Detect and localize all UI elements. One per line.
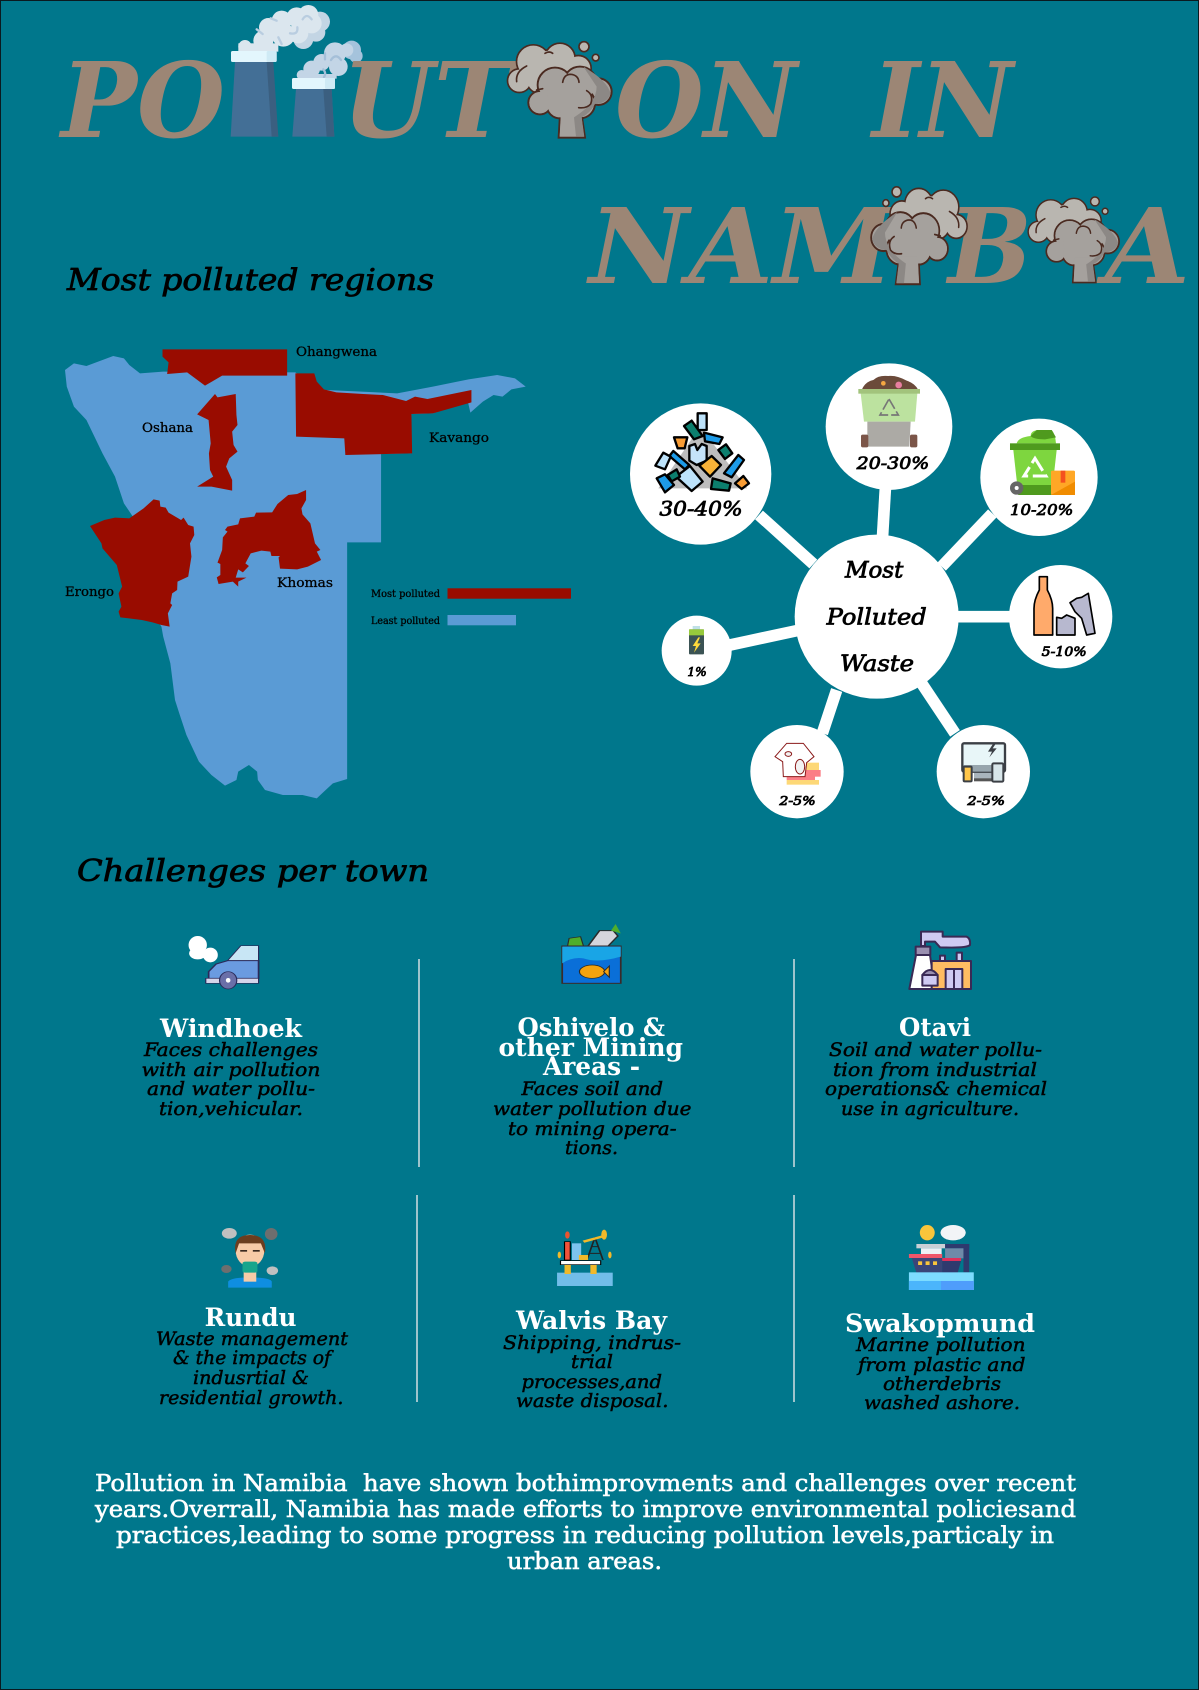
title letters, second line: A: [1096, 185, 1190, 308]
node: textiles 2-5%: 2-5%: [778, 794, 816, 808]
town name: Walvis Bay: [515, 1306, 668, 1335]
icon: ship at sea: [909, 1225, 974, 1290]
node: plastic waste 30-40%: 30-40%: [659, 497, 743, 521]
description: water pollution due: [493, 1098, 692, 1120]
description: tion,vehicular.: [159, 1098, 303, 1120]
town name: [498, 1013, 683, 1081]
title letters, second line: NAM: [586, 185, 897, 308]
panel: most polluted waste network chart: [630, 363, 1112, 818]
description: Shipping, indrus-: [503, 1332, 681, 1354]
heading: challenges per town: Challenges per town: [77, 854, 429, 889]
node: plastic waste 30-40%: [630, 403, 771, 545]
town name: other Mining: [498, 1033, 683, 1062]
icon: smoke cloud as letter I, second: [871, 187, 967, 284]
node: organic waste 20-30%: [826, 363, 952, 490]
map shapes: [65, 349, 526, 798]
centre node: most polluted waste: Waste: [840, 651, 914, 677]
map label: Kavango: Kavango: [429, 431, 489, 446]
map: country outline, least polluted: [65, 356, 526, 798]
card: Rundu: [156, 1228, 348, 1409]
description: Soil and water pollu-: [829, 1039, 1042, 1061]
icon: green recycling bin and box: [1010, 430, 1075, 495]
title letters, first line: PO: [58, 39, 225, 162]
icon: broken computer: [962, 743, 1005, 782]
panel: map of Namibia: [65, 345, 571, 798]
description: [503, 1332, 681, 1412]
town name: Swakopmund: [845, 1309, 1035, 1338]
card: Windhoek: [142, 936, 320, 1120]
card: Walvis Bay: [503, 1230, 681, 1412]
card: Swakopmund: [845, 1225, 1035, 1414]
node: textiles 2-5%: [750, 725, 844, 818]
conclusion text block: Pollution in Namibia have shown bothimprovments and challenges over recent: [95, 1471, 1077, 1497]
description: operations& chemical: [825, 1078, 1047, 1100]
icon: oil rig: [557, 1230, 613, 1286]
spokes: [730, 483, 1010, 733]
node: paper and recycling 10-20%: 10-20%: [1010, 501, 1073, 519]
region: Kavango: [295, 373, 471, 455]
node: paper and recycling 10-20%: [980, 419, 1098, 536]
icon: factory: [909, 932, 971, 989]
town name: Areas -: [542, 1052, 640, 1081]
icon: car with exhaust smoke: [189, 936, 259, 989]
icon: stained shirt and clothes pile: [775, 743, 821, 785]
description: processes,and: [522, 1371, 662, 1393]
node: organic waste 20-30%: 20-30%: [856, 454, 929, 473]
centre node: most polluted waste: [795, 535, 959, 699]
centre node: most polluted waste: Polluted: [826, 604, 927, 630]
icon: smoke cloud as letter I: [508, 42, 612, 138]
region: Khomas: [217, 490, 321, 587]
node: batteries 1%: [662, 616, 732, 686]
description: indusrtial &: [193, 1367, 309, 1389]
region: Ohangwena: [162, 349, 287, 386]
map label: Erongo: Erongo: [65, 585, 114, 600]
node: e-waste 2-5%: [937, 725, 1030, 818]
description: Faces soil and: [520, 1078, 663, 1100]
town name: Oshivelo &: [518, 1013, 665, 1042]
description: with air pollution: [142, 1059, 320, 1081]
region: Oshana: [197, 394, 237, 491]
centre node: most polluted waste: Most: [844, 557, 904, 583]
map label: Ohangwena: Ohangwena: [296, 345, 377, 360]
description: otherdebris: [883, 1373, 1001, 1395]
conclusion text block: practices,leading to some progress in reducing pollution levels,particaly in: [116, 1523, 1054, 1549]
title letters, first line: [58, 39, 1017, 162]
description: [825, 1039, 1047, 1120]
town name: Windhoek: [159, 1014, 303, 1043]
description: [855, 1334, 1026, 1414]
description: to mining opera-: [508, 1118, 676, 1140]
description: tion from industrial: [833, 1059, 1037, 1081]
icon: smoke cloud as letter I, third: [1028, 197, 1119, 283]
icon: plastic pile: [655, 413, 749, 492]
conclusion text block: years.Overrall, Namibia has made efforts to improve environmental policiesand: [94, 1497, 1076, 1523]
description: [156, 1328, 348, 1409]
description: Waste management: [156, 1328, 348, 1350]
card: Otavi: [825, 932, 1047, 1120]
description: trial: [571, 1351, 613, 1373]
description: washed ashore.: [864, 1392, 1020, 1414]
description: and water pollu-: [147, 1078, 315, 1100]
description: tions.: [565, 1137, 618, 1159]
conclusion text block: [94, 1471, 1077, 1575]
legend: Least polluted: [371, 616, 441, 627]
icon: person with mask in smog: [221, 1228, 278, 1288]
description: & the impacts of: [173, 1347, 334, 1369]
icon: polluted water with fish and bottle: [562, 924, 621, 983]
description: [142, 1039, 320, 1120]
node: glass 5-10%: [1009, 565, 1112, 668]
region: Erongo: [90, 499, 194, 627]
conclusion text block: urban areas.: [507, 1549, 662, 1575]
description: from plastic and: [856, 1354, 1026, 1376]
card: Oshivelo and other mining areas: [493, 924, 692, 1159]
title letters, second line: [586, 185, 1190, 308]
description: residential growth.: [159, 1387, 344, 1409]
map label: Khomas: Khomas: [277, 576, 333, 591]
title letters, second line: B: [945, 185, 1032, 308]
icon: battery: [689, 626, 704, 654]
title letters, first line: IN: [869, 39, 1017, 162]
icon: bottle and broken glass: [1034, 577, 1095, 635]
title: Pollution in Namibia: [58, 5, 1190, 308]
legend: [371, 588, 571, 627]
town name: Rundu: [205, 1303, 297, 1332]
description: Faces challenges: [143, 1039, 318, 1061]
description: Marine pollution: [855, 1334, 1026, 1356]
node: e-waste 2-5%: 2-5%: [966, 794, 1005, 808]
description: waste disposal.: [516, 1390, 668, 1412]
town name: Otavi: [899, 1013, 971, 1042]
description: [493, 1078, 692, 1159]
legend: Most polluted: [371, 589, 441, 600]
map label: Oshana: Oshana: [142, 421, 193, 436]
title letters, first line: UT: [342, 39, 519, 162]
heading: most polluted regions: Most polluted regions: [66, 263, 434, 298]
title letters, first line: ON: [615, 39, 801, 162]
node: glass 5-10%: 5-10%: [1042, 644, 1087, 659]
icon: compost bin: [858, 376, 920, 447]
description: use in agriculture.: [841, 1098, 1019, 1120]
node: batteries 1%: 1%: [687, 665, 707, 679]
icon: factory chimneys with smoke: [231, 5, 363, 137]
panel: challenges per town grid: [142, 924, 1047, 1414]
